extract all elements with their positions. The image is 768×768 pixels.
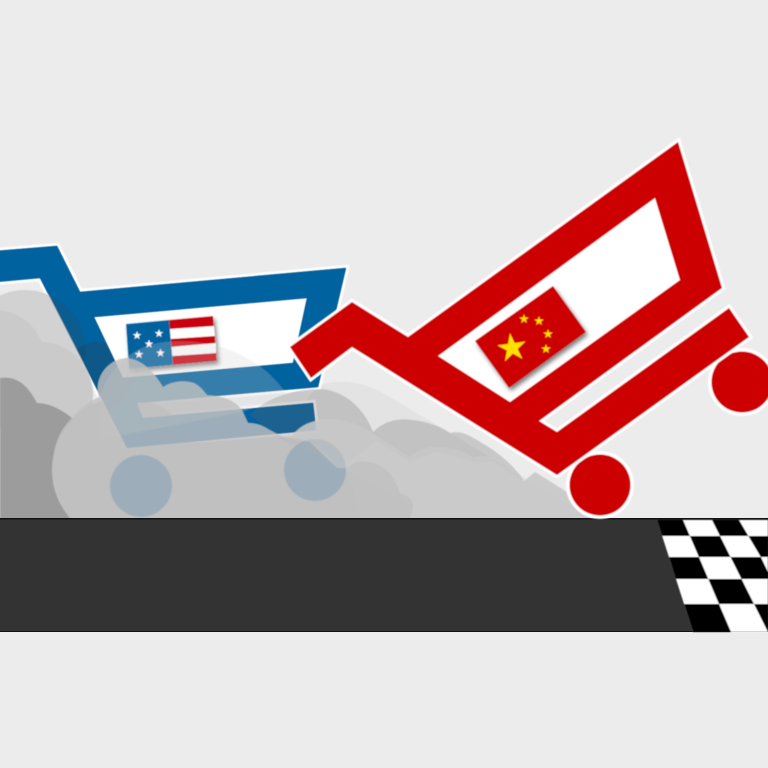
red cart frame [290, 142, 749, 475]
illustration: shopping cart race [0, 138, 768, 633]
blue frame over left clouds [0, 246, 346, 448]
dust veil over cart [99, 341, 287, 440]
dust tint on blue frame [50, 295, 114, 390]
white basket interior [438, 198, 680, 402]
road [0, 519, 768, 632]
road edge lines [0, 518, 768, 632]
right light cloud [290, 420, 600, 519]
blue cart wheels [110, 439, 346, 517]
pale dust haze [300, 382, 570, 519]
dark cloud left [0, 378, 90, 519]
dust clouds [0, 246, 600, 543]
white basket interior [94, 298, 307, 378]
chinese flag [475, 286, 586, 388]
back cloud left [0, 290, 85, 519]
opaque base of front cloud [52, 397, 413, 543]
front big translucent cloud [53, 358, 413, 519]
finish line checker [657, 520, 768, 632]
red cart (China) [290, 142, 768, 516]
middle cloud left [0, 310, 93, 519]
US flag [126, 316, 217, 369]
right dark cloud [250, 389, 525, 483]
blue cart frame [0, 246, 346, 448]
blue cart (USA) [0, 246, 346, 448]
red cart wheels [570, 352, 768, 516]
